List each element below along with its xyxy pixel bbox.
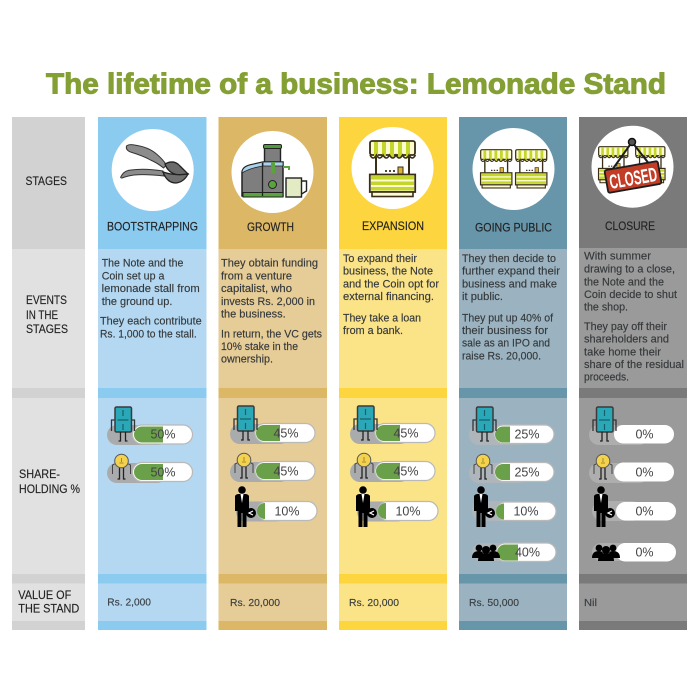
chart: going public shareholding: 25% [514,466,540,480]
panel: closure [579,117,687,630]
text: expansion events: external financing. [343,291,434,303]
icon: closed sign [592,126,674,208]
text: expansion events: They take a loan [343,313,421,325]
heading: closure: CLOSURE [605,219,655,233]
text: closure events: proceeds. [584,372,629,384]
text: closure events: the Note and the [584,276,664,288]
panel: bootstrapping [98,117,206,630]
label: events in the stages: EVENTS [26,293,67,307]
heading: growth: GROWTH [247,220,294,234]
text: closure events: With summer [584,250,651,262]
chart: expansion shareholding: 45% [393,426,419,440]
text: bootstrapping events: Coin set up a [102,270,165,282]
chart: growth shareholding: 10% [274,504,300,518]
text: expansion events: from a bank. [343,325,403,337]
chart: going public shareholding [469,407,556,562]
label: shareholding: SHARE- [19,467,60,481]
chart: expansion shareholding: 45% [393,464,419,478]
chart: expansion shareholding [350,406,438,527]
text: closure events: the shop. [584,302,628,314]
label: events in the stages: STAGES [26,322,68,336]
value: closure: Nil [584,597,597,609]
label: events in the stages [26,293,68,336]
icon: juicer [232,131,314,213]
text: bootstrapping events: The Note and the [102,258,183,270]
value: growth: Rs. 20,000 [230,597,280,609]
chart: growth shareholding: 45% [273,464,299,478]
text: closure events: take home their [584,346,661,358]
text: growth events: ownership. [221,354,273,366]
label: value of the stand [18,588,80,616]
chart: growth shareholding: 45% [273,426,299,440]
text: growth events [221,258,322,366]
chart: bootstrapping shareholding [107,407,192,483]
text: expansion events: business, the Note [343,266,433,278]
text: going public events: They then decide to [462,253,556,265]
chart: closure shareholding: 0% [635,466,654,480]
label: value of the stand: THE STAND [18,602,80,616]
chart: going public shareholding: 25% [514,428,540,442]
text: expansion events: To expand their [343,253,417,265]
text: closure events: shareholders and [584,334,669,346]
heading: bootstrapping: BOOTSTRAPPING [107,220,198,234]
chart: expansion shareholding: 10% [395,504,421,518]
text: going public events: further expand their [462,266,560,278]
label: shareholding [19,467,80,496]
text: closure events [584,250,684,384]
chart: going public shareholding: 40% [515,546,540,560]
text: bootstrapping events: They each contribute [100,316,202,328]
chart: closure shareholding: 0% [635,504,654,518]
text: going public events: They put up 40% of [462,313,554,325]
text: bootstrapping events: Rs. 1,000 to the stall. [100,328,197,340]
text: growth events: invests Rs. 2,000 in [221,296,315,308]
text: going public events [462,253,560,362]
text: going public events: raise Rs. 20,000. [462,350,541,362]
text: bootstrapping events [100,258,202,340]
panel: growth [218,117,327,630]
label: stages: STAGES [26,174,67,188]
text: going public events: it public. [462,291,503,303]
label: value of the stand: VALUE OF [18,588,71,602]
panel: row labels [12,117,85,630]
text: closure events: drawing to a close, [584,264,675,276]
text: bootstrapping events: lemonade stall from [102,283,200,295]
text: growth events: They obtain funding [221,258,318,270]
label: shareholding: HOLDING % [19,482,80,496]
text: going public events: sale as an IPO and [462,338,550,350]
chart: growth shareholding [230,406,317,527]
text: growth events: 10% stake in the [221,341,298,353]
value: expansion: Rs. 20,000 [349,597,399,609]
heading: going public: GOING PUBLIC [475,221,552,235]
text: growth events: capitalist, who [221,283,292,295]
panel: going public [459,117,567,630]
label: events in the stages: IN THE [26,308,58,322]
text: expansion events [343,253,439,337]
chart: bootstrapping shareholding: 50% [150,428,176,442]
text: growth events: the business. [221,309,286,321]
icon: lemonade stall [352,127,434,209]
chart: bootstrapping shareholding: 50% [150,466,176,480]
chart: going public shareholding: 10% [513,504,539,518]
text: going public events: business and make [462,278,557,290]
text: expansion events: and the Coin opt for [343,278,439,290]
icon: two stalls [472,128,554,210]
chart: closure shareholding [589,407,676,562]
text: closure events: share of the residual [584,359,684,371]
text: bootstrapping events: the ground up. [102,296,172,308]
icon: lemon squeezer [112,129,194,211]
text: going public events: their business for [462,325,548,337]
panel: expansion [339,117,447,630]
icon: closed sign: CLOSED [608,164,659,194]
chart: closure shareholding: 0% [635,546,654,560]
text: closure events: Coin decide to shut [584,289,677,301]
text: growth events: from a venture [221,270,292,282]
heading: expansion: EXPANSION [362,219,424,233]
value: bootstrapping: Rs. 2,000 [107,597,151,609]
title: The lifetime of a business: Lemonade Stand [46,68,666,100]
chart: closure shareholding: 0% [635,428,654,442]
text: growth events: In return, the VC gets [221,328,322,340]
value: going public: Rs. 50,000 [469,597,519,609]
text: closure events: They pay off their [584,321,667,333]
